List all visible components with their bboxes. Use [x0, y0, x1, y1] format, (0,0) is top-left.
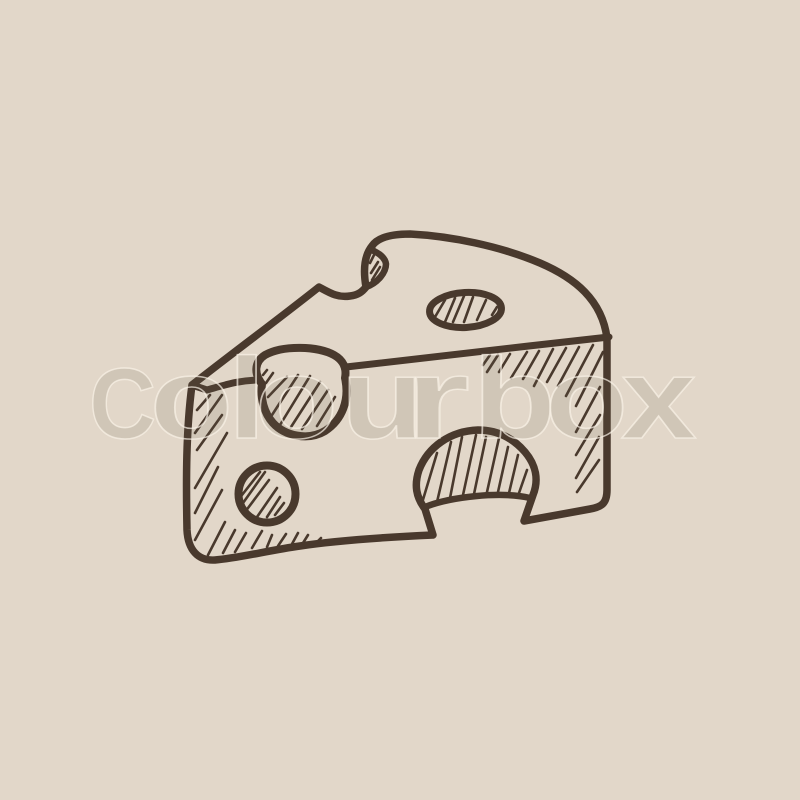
- arch lower edge: [425, 495, 530, 507]
- large hole on edge: [256, 348, 346, 436]
- watermark: Colourbox: r: [405, 334, 470, 463]
- oval hole on top: [429, 291, 502, 329]
- watermark: Colourbox: box: [473, 334, 697, 463]
- icon: cheese wedge: [187, 234, 609, 560]
- cheese outline: [187, 234, 607, 560]
- watermark: Colourbox: [89, 334, 697, 463]
- front top edge left: [192, 380, 260, 390]
- watermark: Colourbox: olou: [150, 334, 424, 463]
- round hole on front: [238, 466, 296, 522]
- front top edge right: [346, 337, 609, 367]
- notch in top face: [366, 249, 386, 287]
- hatching: [195, 255, 603, 555]
- watermark: Colourbox: C: [89, 349, 156, 460]
